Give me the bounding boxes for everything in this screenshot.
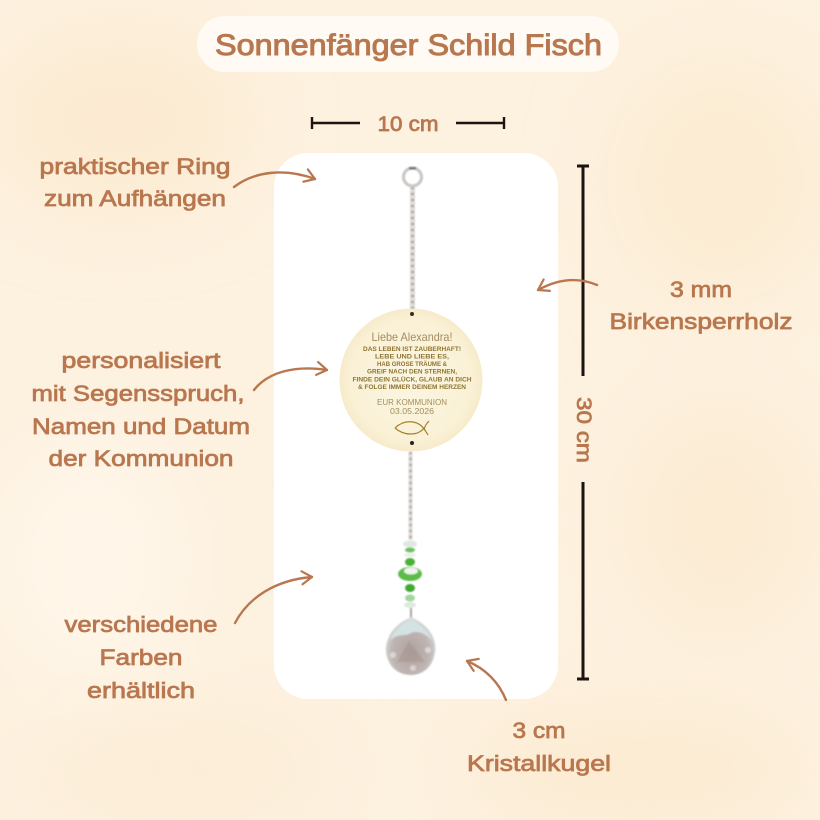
height dimension: 30 cm [572, 166, 595, 679]
arrow [538, 280, 597, 290]
callout: crystal [467, 661, 611, 776]
green beads [398, 540, 422, 618]
width dimension: 10 cm: 10 cm [378, 113, 438, 136]
engraved text: HAB GROSE TRÄUME & [377, 361, 448, 368]
callout: colours: erhältlich [87, 678, 195, 703]
arrow [235, 577, 312, 623]
arrow [234, 172, 315, 187]
callout: personalised: der Kommunion [48, 446, 234, 471]
engraved text: 03.05.2026 [390, 406, 434, 416]
icon: hanging ring [404, 167, 422, 186]
engraved text: & FOLGE IMMER DEINEM HERZEN [358, 384, 467, 391]
engraved text: LEBE UND LIEBE ES, [375, 354, 449, 360]
arrow [254, 368, 327, 390]
lower chain [408, 452, 412, 540]
callout: personalised: personalisiert [62, 348, 221, 373]
callout: ring [40, 154, 315, 211]
callout: crystal: Kristallkugel [467, 751, 611, 776]
callout: colours: Farben [100, 645, 182, 670]
callout: personalised: Namen und Datum [32, 414, 250, 439]
upper chain [410, 187, 415, 310]
callout: material [538, 277, 792, 334]
callout: personalised [32, 348, 327, 471]
engraved text: Liebe Alexandra! [372, 330, 452, 344]
callout: ring: zum Aufhängen [44, 186, 226, 211]
callout: colours: verschiedene [64, 612, 218, 637]
callout: personalised: mit Segensspruch, [32, 381, 244, 406]
crystal ball [386, 617, 435, 675]
callout: ring: praktischer Ring [40, 154, 230, 179]
callout: colours [64, 577, 312, 703]
arrow [467, 661, 506, 700]
engraved text: EUR KOMMUNION [377, 397, 447, 407]
title [197, 16, 619, 72]
engraved text [352, 330, 472, 416]
callout: crystal: 3 cm [512, 718, 566, 743]
title: Sonnenfänger Schild Fisch [215, 29, 602, 62]
icon: ichthys fish [395, 421, 429, 435]
engraved text: FINDE DEIN GLÜCK, GLAUB AN DICH [352, 376, 472, 384]
callout: material: 3 mm [670, 277, 732, 302]
height dimension: 30 cm: 30 cm [572, 397, 595, 463]
callout: material: Birkensperrholz [610, 309, 792, 334]
width dimension: 10 cm [312, 113, 504, 136]
wooden disc with engraving [340, 308, 482, 452]
engraved text: GREIF NACH DEN STERNEN, [367, 368, 457, 376]
engraved text: DAS LEBEN IST ZAUBERHAFT! [363, 346, 461, 353]
white product panel [274, 153, 558, 699]
product: suncatcher [340, 167, 482, 675]
